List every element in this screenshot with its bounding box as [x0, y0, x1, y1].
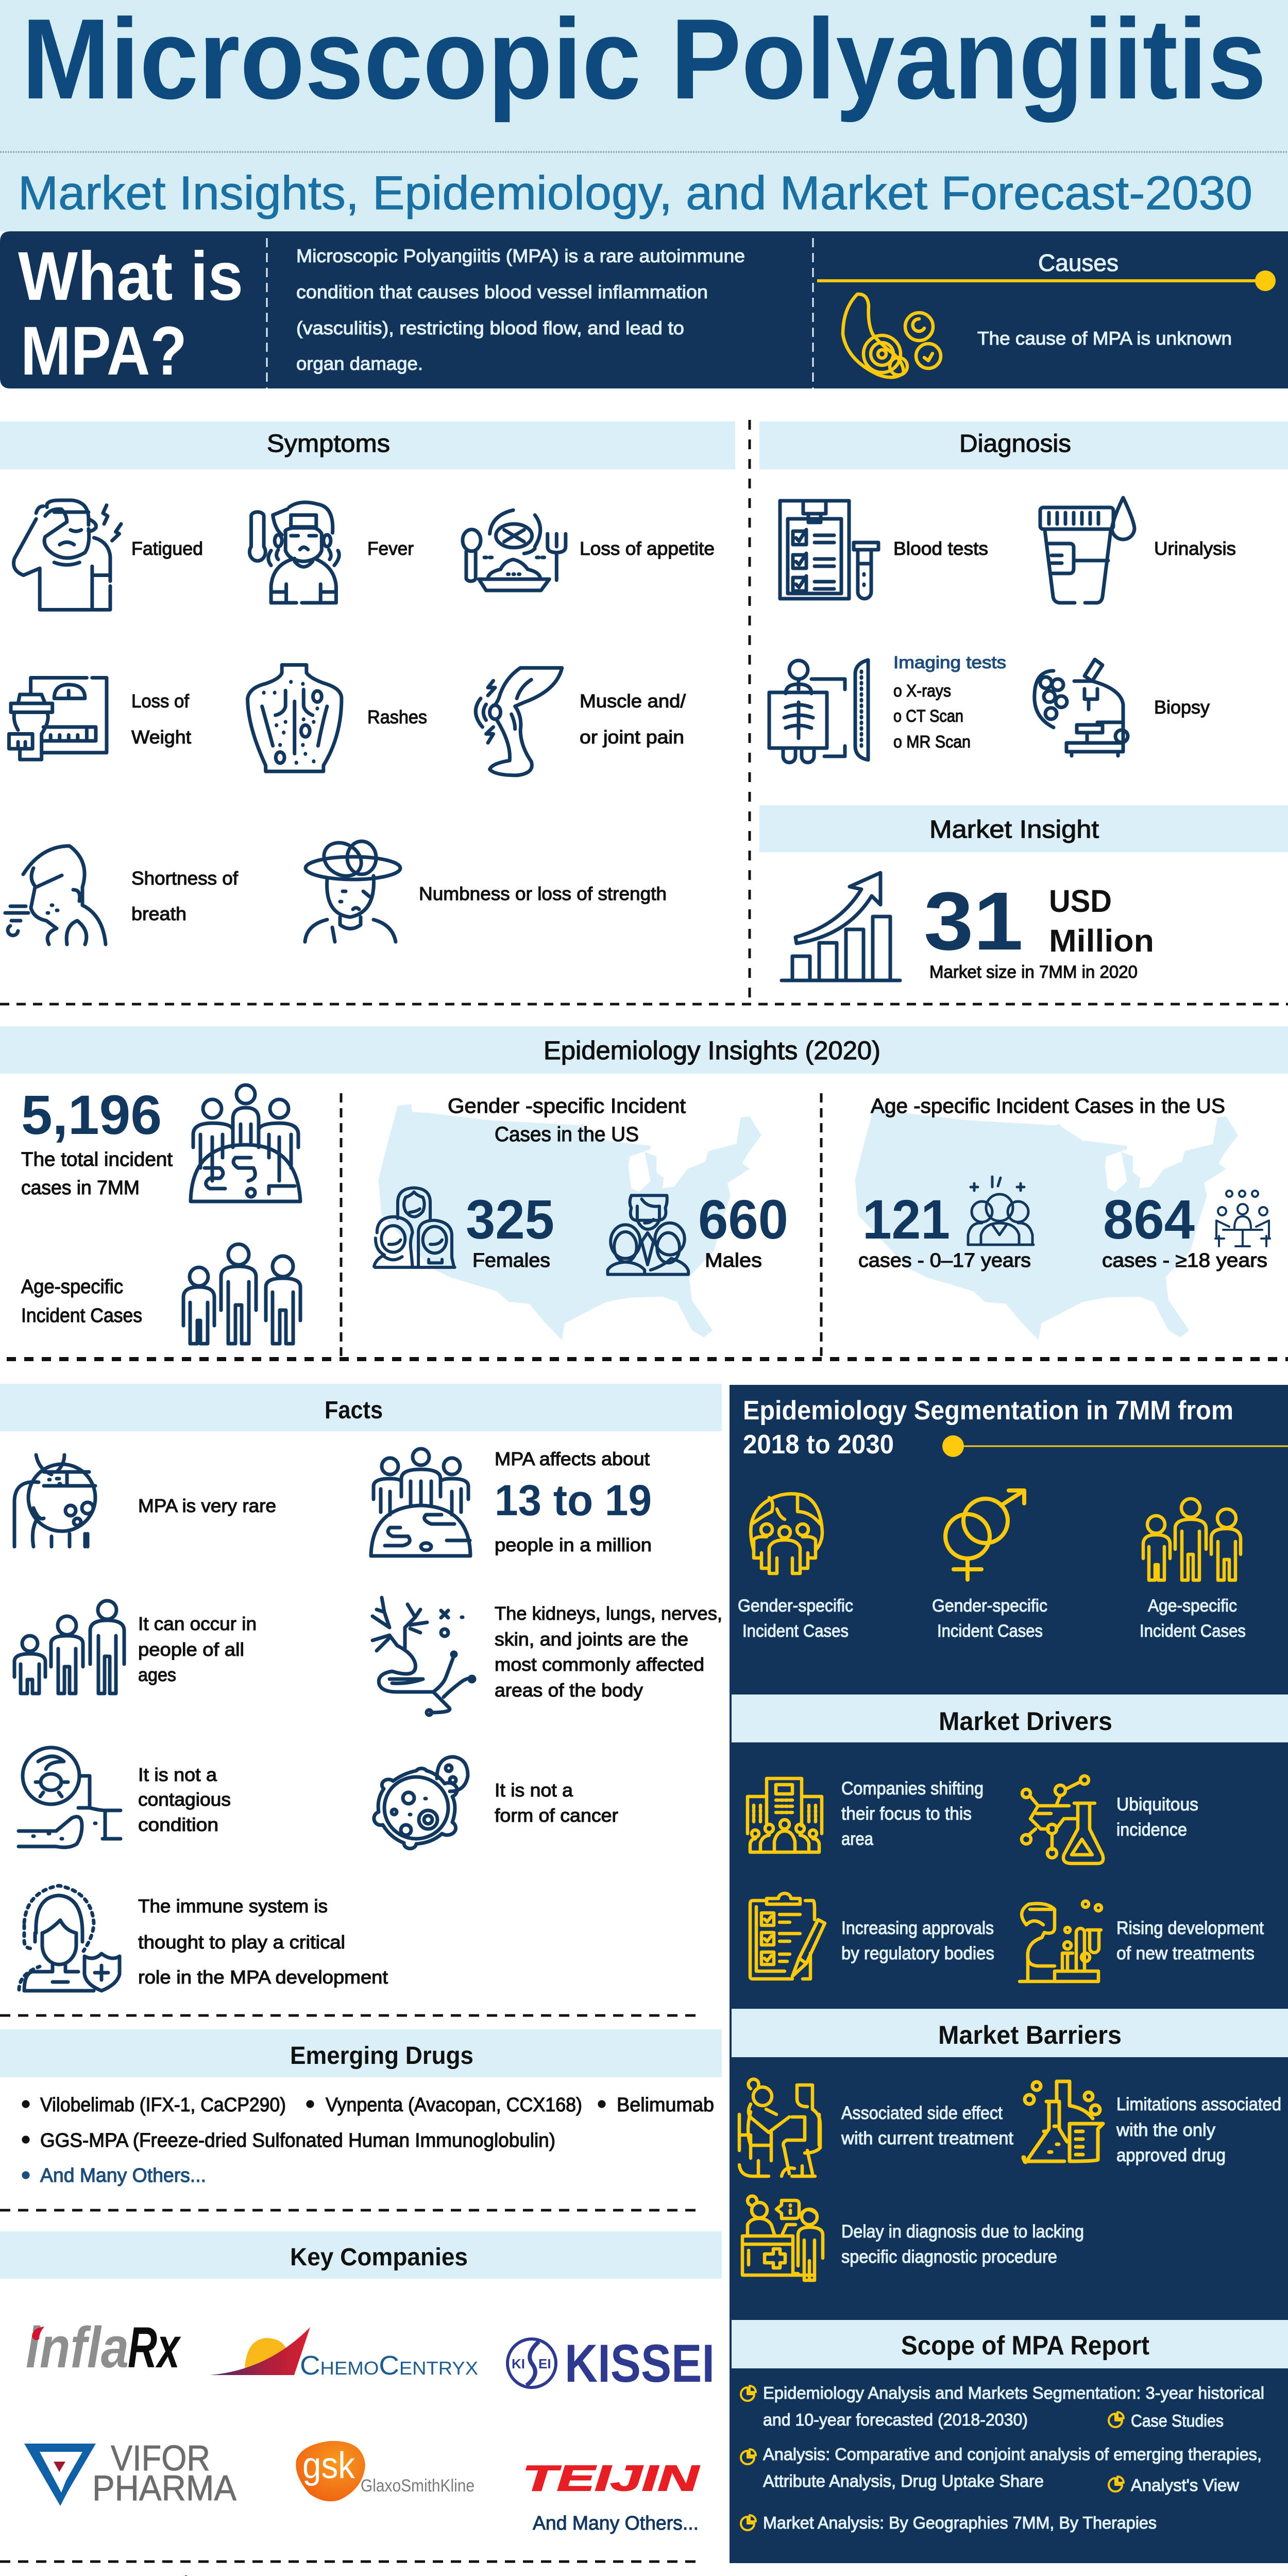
text: segment labels: Age-specific [1148, 1596, 1237, 1616]
text: ubiquitous incidence [1116, 1794, 1198, 1840]
text: limitations [1116, 2094, 1281, 2165]
text: companies shifting: Companies shifting [841, 1778, 984, 1799]
text: fatigued: Fatigued [131, 538, 203, 559]
logo: GSK: GlaxoSmithKline [361, 2476, 474, 2496]
number: 864: 864 [1103, 1188, 1195, 1250]
icon: urinalysis [1040, 498, 1134, 603]
text: loss of weight: Weight [131, 726, 191, 748]
text: cause unknown: The cause of MPA is unknown [977, 328, 1232, 349]
logo: ChemoCentryx [210, 2327, 478, 2381]
icon: numbness [305, 836, 400, 942]
logo: Kissei: KI [512, 2356, 525, 2371]
heading: epidemiology segmentation [743, 1396, 1233, 1460]
text: immune: The immune system is [138, 1895, 328, 1917]
icon: children [968, 1177, 1033, 1245]
text: urinalysis: Urinalysis [1154, 538, 1236, 559]
icon: immune system [19, 1886, 120, 1991]
text block: definition: Microscopic Polyangiitis (MPA) is a rare autoimmune [296, 245, 745, 266]
panel: epidemiology insights [0, 1026, 1288, 1356]
heading: market barriers [732, 2009, 1288, 2057]
icon: shortness of breath [5, 846, 106, 944]
text: increasing approvals: by regulatory bodies [841, 1943, 994, 1963]
text: biopsy: Biopsy [1154, 697, 1210, 718]
icon: not contagious [19, 1748, 121, 1848]
text: all ages: people of all [138, 1639, 244, 1660]
scope text: Analyst's View [1131, 2476, 1239, 2495]
icon: checklist [750, 1893, 825, 1979]
text: total incident cases: cases in 7MM [21, 1177, 140, 1199]
scope text: Case Studies [1131, 2411, 1224, 2430]
icon: globe people yellow [751, 1494, 822, 1573]
text: all ages: ages [138, 1664, 176, 1685]
text: limitations: approved drug [1116, 2145, 1226, 2165]
text: segment labels: Gender-specific [738, 1596, 853, 1616]
icon: family yellow [1143, 1499, 1241, 1580]
text: gender heading [448, 1095, 686, 1146]
icon: cells [843, 294, 941, 377]
panel: emerging drugs [0, 2029, 722, 2187]
icon: building [748, 1778, 822, 1852]
big number: 5,196: 5,196 [21, 1083, 162, 1146]
text: shortness of breath [131, 868, 239, 924]
text: increasing approvals: Increasing approvals [841, 1918, 994, 1938]
logo: Vifor Pharma: VIFOR [111, 2438, 210, 2478]
panel: symptoms [0, 421, 735, 944]
text block: definition: organ damage. [296, 353, 423, 374]
list: drugs [22, 2094, 714, 2187]
text: imaging tests: Imaging tests [893, 653, 1006, 672]
text: rising development: Rising development [1116, 1918, 1264, 1938]
text: total incident cases: The total incident [21, 1149, 173, 1171]
panel: market insight [759, 805, 1288, 982]
panel: diagnosis [759, 421, 1288, 762]
panel: facts [0, 1384, 722, 1991]
heading: market insight: Market Insight [929, 816, 1099, 843]
heading: facts: Facts [325, 1397, 383, 1424]
text: cases 0-17: cases - 0–17 years [858, 1250, 1031, 1272]
icon: molecule flask [1022, 1776, 1103, 1863]
header banner [0, 0, 1288, 231]
text: shortness of breath: Shortness of [131, 868, 239, 889]
text: USD Million: Million [1049, 923, 1154, 958]
text: age-specific incident cases: Incident Cases [21, 1305, 142, 1327]
scope text: Analysis: Comparative and conjoint analysis of emerging therapies, [763, 2445, 1262, 2464]
text: loss of weight [131, 690, 191, 748]
number: 660: 660 [698, 1188, 788, 1250]
heading: market drivers: Market Drivers [939, 1707, 1112, 1736]
text: affects [495, 1448, 652, 1555]
heading: key companies [0, 2231, 722, 2279]
text: rising development: of new treatments [1116, 1943, 1255, 1963]
logo: GSK [296, 2441, 474, 2501]
text: limitations: with the only [1116, 2120, 1215, 2140]
text: side effect: Associated side effect [841, 2103, 1003, 2123]
text: not contagious [138, 1764, 231, 1835]
text: rising development [1116, 1918, 1264, 1963]
icon: biopsy [1035, 659, 1128, 756]
logo: GSK: gsk [302, 2445, 355, 2486]
text: not cancer: form of cancer [495, 1805, 618, 1826]
heading: market insight [759, 805, 1288, 852]
subtitle: Market Insights, Epidemiology, and Market Forecast-2030 [18, 167, 1252, 219]
text: USD Million: USD [1049, 884, 1112, 919]
text: affects: MPA affects about [495, 1448, 650, 1469]
text: imaging tests: o CT Scan [893, 706, 963, 725]
text: immune [138, 1895, 388, 1988]
text: muscle pain [580, 690, 686, 748]
text: not cancer [495, 1780, 618, 1826]
logo: Vifor Pharma [24, 2438, 236, 2508]
text: numbness: Numbness or loss of strength [419, 883, 667, 904]
text: USD Million [1049, 884, 1154, 958]
icon: gender symbols [945, 1490, 1024, 1580]
heading: diagnosis [759, 421, 1288, 469]
list: scope items [741, 2383, 1264, 2532]
text: age-specific incident cases: Age-specific [21, 1276, 123, 1298]
heading: market drivers [732, 1694, 1288, 1742]
heading: facts [0, 1384, 722, 1431]
text: affected areas: areas of the body [495, 1680, 643, 1701]
text: not contagious: contagious [138, 1789, 231, 1810]
text: imaging tests [893, 653, 1006, 751]
icon: rashes [248, 665, 342, 771]
icon: researcher [1020, 1901, 1101, 1981]
text: fever: Fever [367, 538, 414, 559]
icon: doctor patient [739, 2079, 820, 2176]
logo: Kissei: EI [538, 2356, 551, 2371]
text: shortness of breath: breath [131, 903, 187, 924]
panel: right dark column [730, 1385, 1288, 2563]
icon: rare [14, 1455, 95, 1547]
big number: 31: 31 [924, 875, 1023, 967]
text block: definition [296, 245, 745, 374]
text: muscle pain: Muscle and/ [580, 690, 686, 711]
text: segment labels: Incident Cases [937, 1621, 1043, 1641]
bullet icons [741, 2386, 1124, 2530]
text: not contagious: condition [138, 1814, 218, 1835]
text: all ages [138, 1613, 257, 1685]
scope text: and 10-year forecasted (2018-2030) [763, 2410, 1028, 2429]
icon: reception [742, 2196, 823, 2280]
text: affected areas [495, 1603, 722, 1701]
logo: InflaRx: infla [26, 2315, 129, 2380]
logo: Kissei: KISSEI [565, 2334, 715, 2394]
icon: males [607, 1195, 688, 1275]
text: segment labels: Gender-specific [932, 1596, 1047, 1616]
icon: people on globe [191, 1085, 300, 1201]
text: affected areas: The kidneys, lungs, nerves, [495, 1603, 722, 1624]
icon: cell [374, 1757, 468, 1849]
text: companies shifting [841, 1778, 984, 1849]
text: imaging tests: o X-rays [893, 681, 951, 700]
text: side effect: with current treatment [841, 2128, 1013, 2148]
list: drugs: And Many Others... [40, 2165, 206, 2187]
text: muscle pain: or joint pain [580, 726, 684, 748]
text: males: Males [705, 1250, 762, 1272]
icon: imaging tests [769, 660, 868, 762]
text: side effect [841, 2103, 1013, 2148]
text: rashes: Rashes [367, 706, 427, 727]
scope text: Epidemiology Analysis and Markets Segmentation: 3-year historical [763, 2383, 1264, 2402]
text: gender heading: Cases in the US [495, 1123, 639, 1146]
text: loss of weight: Loss of [131, 690, 190, 711]
icon: growth chart [782, 873, 900, 980]
text: delay in diagnosis: Delay in diagnosis due to lacking [841, 2222, 1084, 2242]
logo: Kissei [507, 2334, 715, 2394]
icon: loss of weight [9, 677, 107, 759]
heading: symptoms: Symptoms [267, 430, 390, 457]
heading: what is MPA [18, 238, 243, 389]
scope text: Market Analysis: By Geographies 7MM, By Therapies [763, 2513, 1157, 2532]
icon: people on globe small [371, 1449, 470, 1556]
icon: blood tests [780, 501, 878, 599]
list: drugs: Belimumab [617, 2094, 714, 2116]
icon: flasks [1023, 2081, 1103, 2162]
heading: emerging drugs: Emerging Drugs [290, 2042, 473, 2070]
text: segment labels [738, 1596, 1246, 1641]
logo: ChemoCentryx: ChemoCentryx [300, 2351, 478, 2381]
heading: emerging drugs [0, 2029, 722, 2077]
heading: causes: Causes [1038, 249, 1118, 276]
icon: loss of appetite [463, 510, 566, 590]
text: segment labels: Incident Cases [742, 1621, 849, 1641]
text: blood tests: Blood tests [893, 538, 988, 559]
text: immune: role in the MPA development [138, 1967, 388, 1988]
text: companies shifting: their focus to this [841, 1804, 972, 1824]
scope text [763, 2383, 1264, 2532]
text: ubiquitous incidence: incidence [1116, 1820, 1187, 1840]
text: increasing approvals [841, 1918, 994, 1963]
text: delay in diagnosis: specific diagnostic procedure [841, 2247, 1057, 2267]
heading: epidemiology segmentation: Epidemiology Segmentation in 7MM from [743, 1396, 1233, 1426]
heading: scope of MPA report: Scope of MPA Report [901, 2331, 1149, 2361]
text: rare: MPA is very rare [138, 1495, 276, 1516]
text: market size: Market size in 7MM in 2020 [929, 962, 1138, 982]
text block: definition: (vasculitis), restricting blood flow, and lead to [296, 317, 684, 338]
heading: symptoms [0, 421, 735, 469]
text block: definition: condition that causes blood vessel inflammation [296, 281, 708, 302]
text: loss of appetite: Loss of appetite [580, 538, 715, 559]
map: US gender [379, 1104, 761, 1340]
text: all ages: It can occur in [138, 1613, 257, 1634]
icon: fever [249, 502, 339, 603]
logo: InflaRx: Rx [128, 2315, 181, 2380]
heading: diagnosis: Diagnosis [959, 430, 1071, 457]
heading: epidemiology insights: Epidemiology Insights (2020) [544, 1036, 880, 1065]
icon: fatigued [14, 500, 121, 609]
heading: epidemiology insights [0, 1026, 1288, 1074]
icon: muscle pain [476, 668, 562, 775]
text: segment labels: Incident Cases [1140, 1621, 1246, 1641]
text: affected areas: most commonly affected [495, 1654, 704, 1675]
text: age heading: Age -specific Incident Cases in the US [871, 1095, 1225, 1117]
icon: nerve [372, 1598, 474, 1715]
scope text: Attribute Analysis, Drug Uptake Share [763, 2471, 1044, 2490]
map: US age [855, 1104, 1238, 1340]
text: ubiquitous incidence: Ubiquitous [1116, 1794, 1198, 1815]
number: 325: 325 [466, 1188, 554, 1250]
heading: what is MPA: MPA? [21, 313, 187, 389]
icon: family [183, 1244, 300, 1344]
list: drugs: GGS-MPA (Freeze-dried Sulfonated Human Immunoglobulin) [40, 2130, 555, 2151]
panel: what is MPA [0, 231, 1288, 389]
panel: key companies [0, 2231, 722, 2534]
heading: epidemiology segmentation: 2018 to 2030 [743, 1430, 894, 1460]
icon: all ages [14, 1601, 124, 1693]
heading: scope of MPA report [732, 2320, 1288, 2368]
text: total incident cases [21, 1149, 173, 1199]
logo: Vifor Pharma: PHARMA [92, 2468, 236, 2508]
text: affected areas: skin, and joints are the [495, 1629, 688, 1650]
icon: females [374, 1188, 455, 1267]
text: gender heading: Gender -specific Incident [448, 1095, 686, 1117]
list: drugs: Vynpenta (Avacopan, CCX168) [326, 2094, 582, 2116]
text: age-specific incident cases [21, 1276, 142, 1327]
text: affects: 13 to 19 [495, 1476, 652, 1524]
text: immune: thought to play a critical [138, 1931, 345, 1953]
heading: what is MPA: What is [18, 238, 243, 315]
text: and many others: And Many Others... [533, 2513, 699, 2534]
text: not cancer: It is not a [495, 1780, 573, 1801]
list: drugs: Vilobelimab (IFX-1, CaCP290) [40, 2094, 286, 2116]
heading: market barriers: Market Barriers [938, 2021, 1122, 2049]
heading: key companies: Key Companies [290, 2244, 468, 2271]
number: 121: 121 [862, 1188, 950, 1250]
text: affects: people in a million [495, 1534, 652, 1555]
icon: adults at table [1215, 1191, 1270, 1246]
text: imaging tests: o MR Scan [893, 732, 971, 751]
text: delay in diagnosis [841, 2222, 1084, 2267]
text: cases 18+: cases - ≥18 years [1102, 1250, 1267, 1272]
text: companies shifting: area [841, 1829, 873, 1849]
text: females: Females [472, 1250, 550, 1272]
logo: Teijin: TEIJIN [522, 2458, 700, 2498]
text: not contagious: It is not a [138, 1764, 217, 1785]
